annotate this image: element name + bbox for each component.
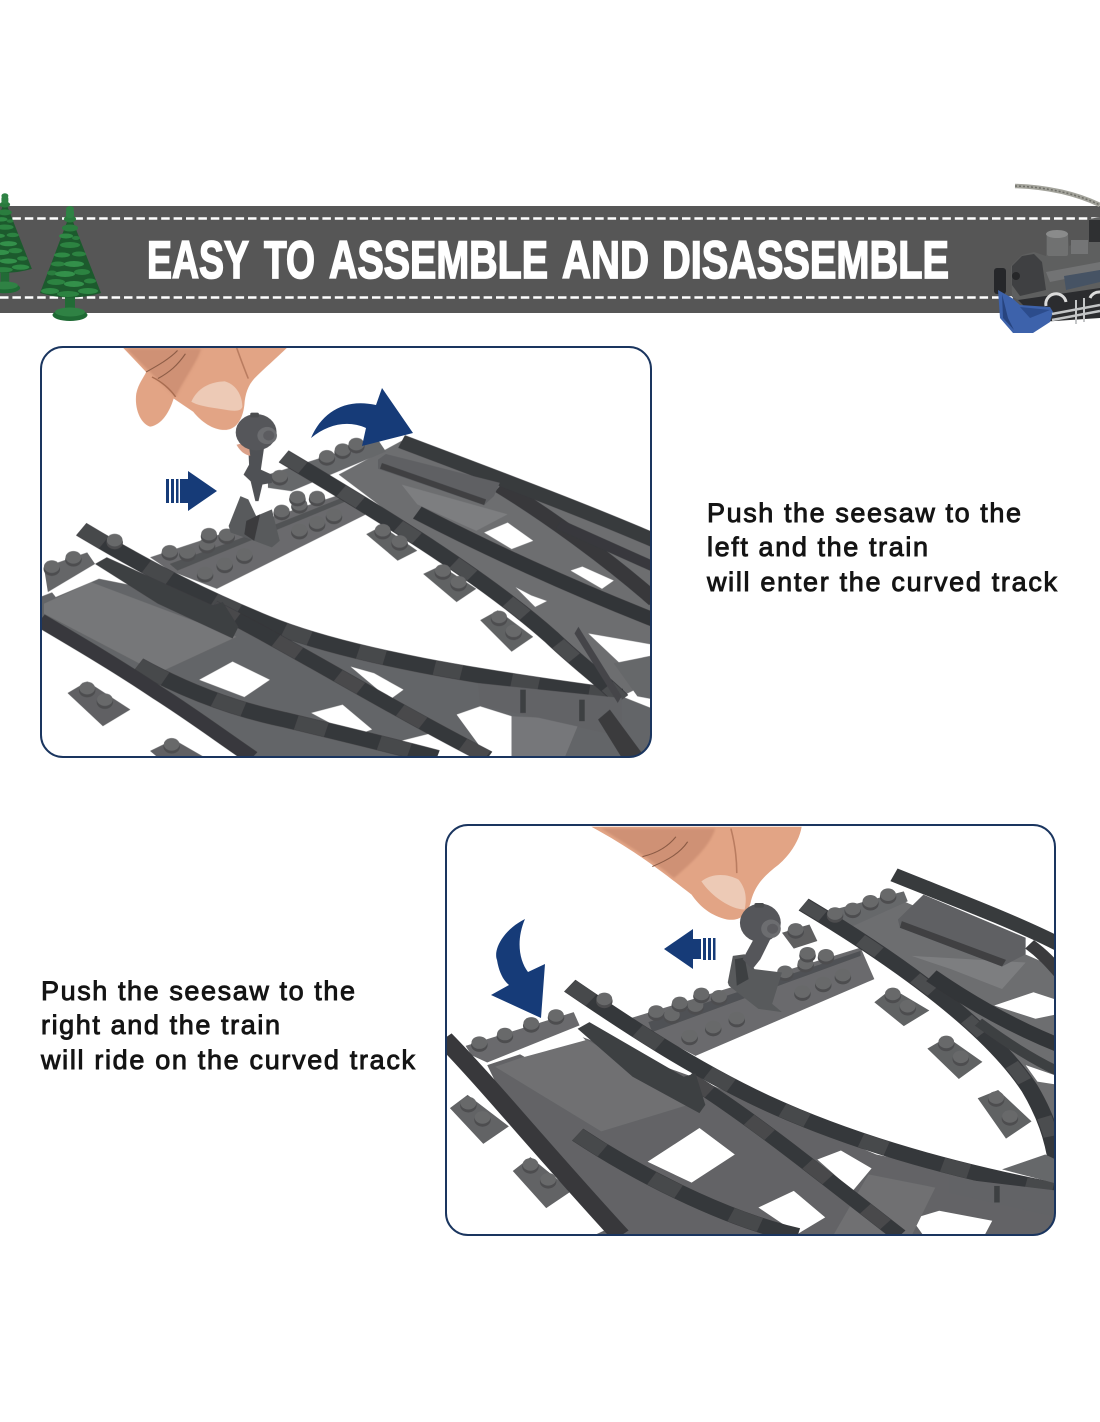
title: TO (264, 231, 315, 290)
counterweight (740, 904, 781, 942)
arrow: straight left (664, 929, 716, 969)
counterweight (236, 414, 277, 450)
lower track floor (40, 577, 655, 758)
icon: pine tree front (40, 206, 101, 321)
text: caption 2: right and the train (41, 1010, 280, 1040)
arrow: curved blue down (491, 919, 545, 1018)
text: caption 1: Push the seesaw to the (707, 498, 1021, 528)
arrow: curved blue (311, 388, 413, 446)
lower switch plate (95, 557, 238, 638)
track photo illustration, panel 2 (444, 827, 1059, 1236)
upper track floor (853, 902, 1054, 1119)
hand (123, 347, 288, 430)
title: EASY (147, 231, 249, 290)
text: caption 1: left and the train (707, 532, 928, 562)
text: caption 2 (40, 976, 416, 1075)
lower switch plate (578, 1022, 705, 1113)
infographic page (0, 184, 1100, 1236)
rails (40, 441, 655, 758)
text: caption 1 (706, 498, 1058, 597)
studs (471, 1036, 488, 1052)
seesaw lever (244, 446, 272, 501)
stud plate (150, 491, 366, 589)
panel: push seesaw left (40, 347, 655, 758)
seesaw lever (743, 938, 770, 969)
text: caption 2: Push the seesaw to the (41, 976, 355, 1006)
text: caption 1: will enter the curved track (706, 567, 1058, 597)
title: AND (562, 231, 649, 290)
lower-left sleeper (44, 552, 95, 592)
left sleepers (450, 1094, 607, 1234)
top sleeper (268, 440, 386, 491)
upper track floor (339, 440, 655, 696)
arrow: straight right (166, 471, 217, 511)
track photo illustration, panel 1 (40, 347, 655, 758)
hand (591, 827, 802, 920)
right-side stud stubs (874, 988, 1032, 1139)
icon: toy locomotive (994, 186, 1100, 333)
rails (444, 875, 1059, 1236)
left sleeper (466, 1012, 580, 1062)
seesaw stand (229, 496, 280, 547)
seesaw stand (728, 954, 782, 1012)
icon: pine tree back (0, 193, 32, 293)
title: ASSEMBLE (329, 231, 548, 290)
text: caption 2: will ride on the curved track (40, 1045, 416, 1075)
title: DISASSEMBLE (662, 231, 949, 290)
right-side stud stubs (366, 526, 533, 652)
raised switch plate (378, 454, 500, 505)
panel: push seesaw right (444, 825, 1059, 1236)
banner: road strip (0, 206, 1100, 313)
frog block (480, 683, 622, 726)
raised switch plate (898, 895, 1026, 966)
stud plate (629, 948, 874, 1056)
top sleeper (839, 891, 908, 921)
studs (65, 551, 82, 567)
bottom-left sleepers (68, 681, 205, 758)
lower track floor (487, 1035, 1059, 1236)
title (147, 231, 949, 290)
frog block (974, 1180, 1054, 1198)
